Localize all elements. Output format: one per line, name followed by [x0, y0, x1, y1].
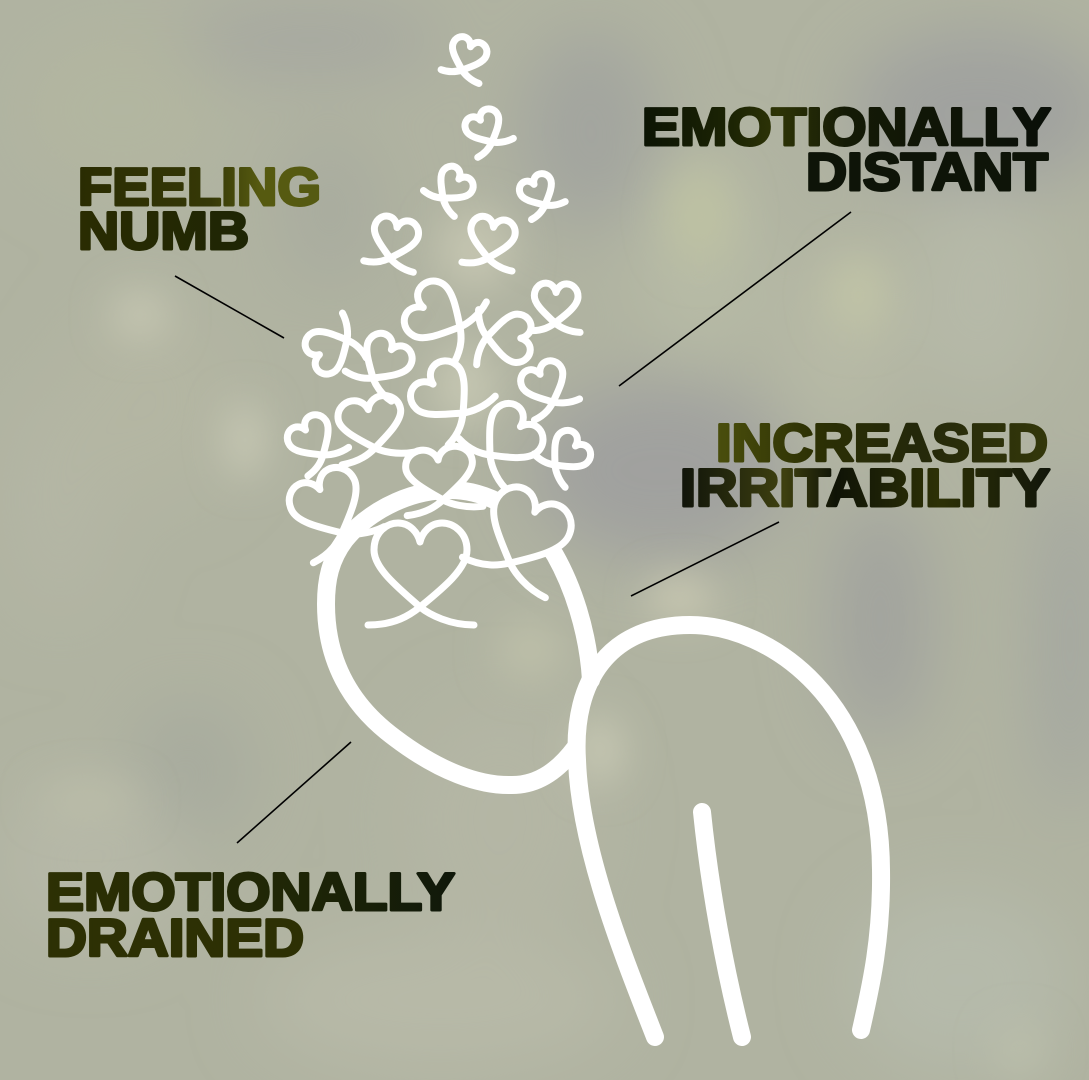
body outline: [577, 625, 881, 1037]
label: emotionally distant: [642, 98, 1051, 202]
label line: feeling numb: [175, 276, 284, 338]
label: emotionally distant: EMOTIONALLY: [642, 98, 1051, 157]
label: emotionally distant: DISTANT: [806, 143, 1048, 202]
label: increased irritability: [680, 414, 1050, 518]
label line: emotionally drained: [237, 742, 351, 843]
label: feeling numb: FEELING: [78, 158, 321, 217]
inner leg line: [702, 812, 742, 1037]
head outline: [326, 490, 591, 785]
hearts rising from head: [279, 33, 597, 625]
label: emotionally drained: EMOTIONALLY: [46, 863, 455, 922]
label line: increased irritability: [631, 522, 779, 596]
label: feeling numb: NUMB: [78, 202, 249, 261]
label: increased irritability: IRRITABILITY: [680, 459, 1050, 518]
label: increased irritability: INCREASED: [716, 414, 1048, 473]
label: feeling numb: [78, 158, 321, 261]
figure: person outline: [326, 490, 881, 1037]
label: emotionally drained: [46, 863, 455, 968]
label line: emotionally distant: [619, 212, 851, 386]
label: emotionally drained: DRAINED: [46, 909, 304, 968]
